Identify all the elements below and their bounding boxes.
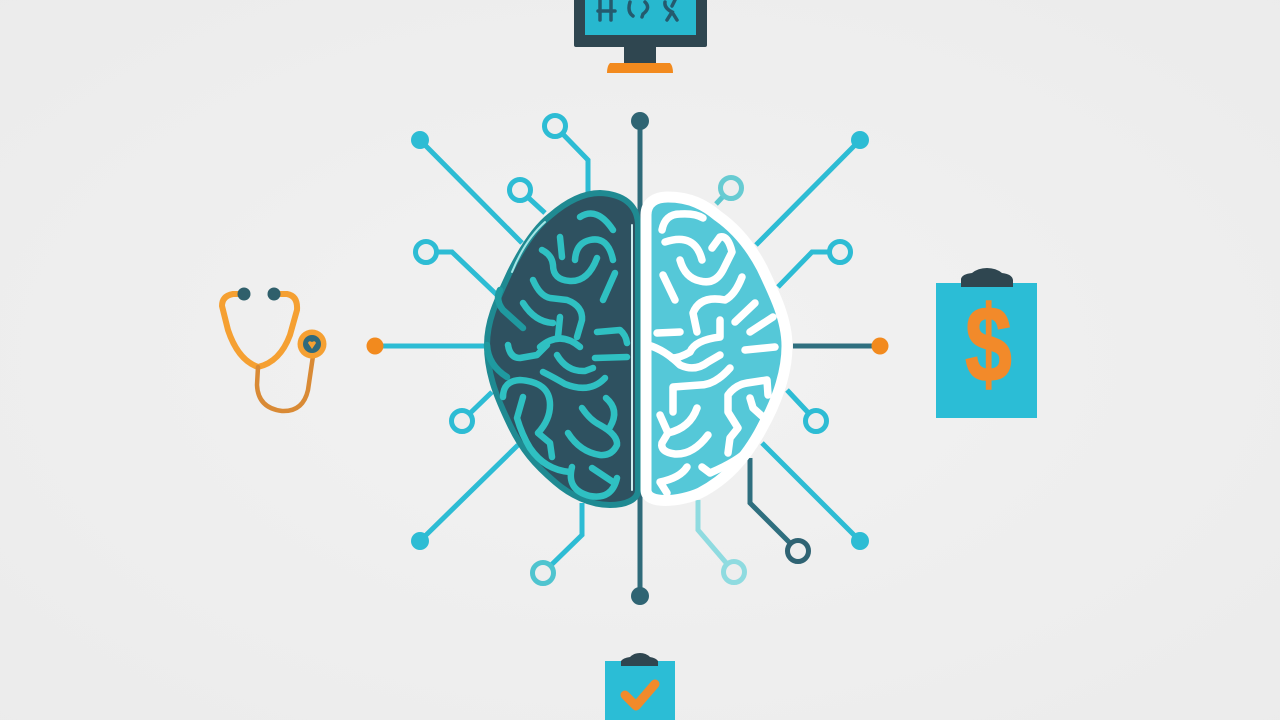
icon: stethoscope [222, 288, 326, 411]
check mark [625, 684, 655, 706]
icon: computer monitor [574, 0, 707, 73]
connector lines: right side [698, 131, 888, 582]
monitor screen glyphs [598, 0, 677, 20]
brain: right hemisphere [646, 197, 787, 500]
icon: clipboard with dollar sign [936, 268, 1037, 418]
connector lines: left side [366, 116, 588, 584]
right hemisphere folds [648, 214, 775, 493]
dollar sign: $ [965, 283, 1012, 404]
brain: left hemisphere [487, 193, 638, 505]
stethoscope heart [308, 341, 316, 349]
central vertical connector [631, 112, 649, 605]
left hemisphere folds [487, 214, 632, 497]
icon: clipboard with check mark [605, 653, 675, 720]
